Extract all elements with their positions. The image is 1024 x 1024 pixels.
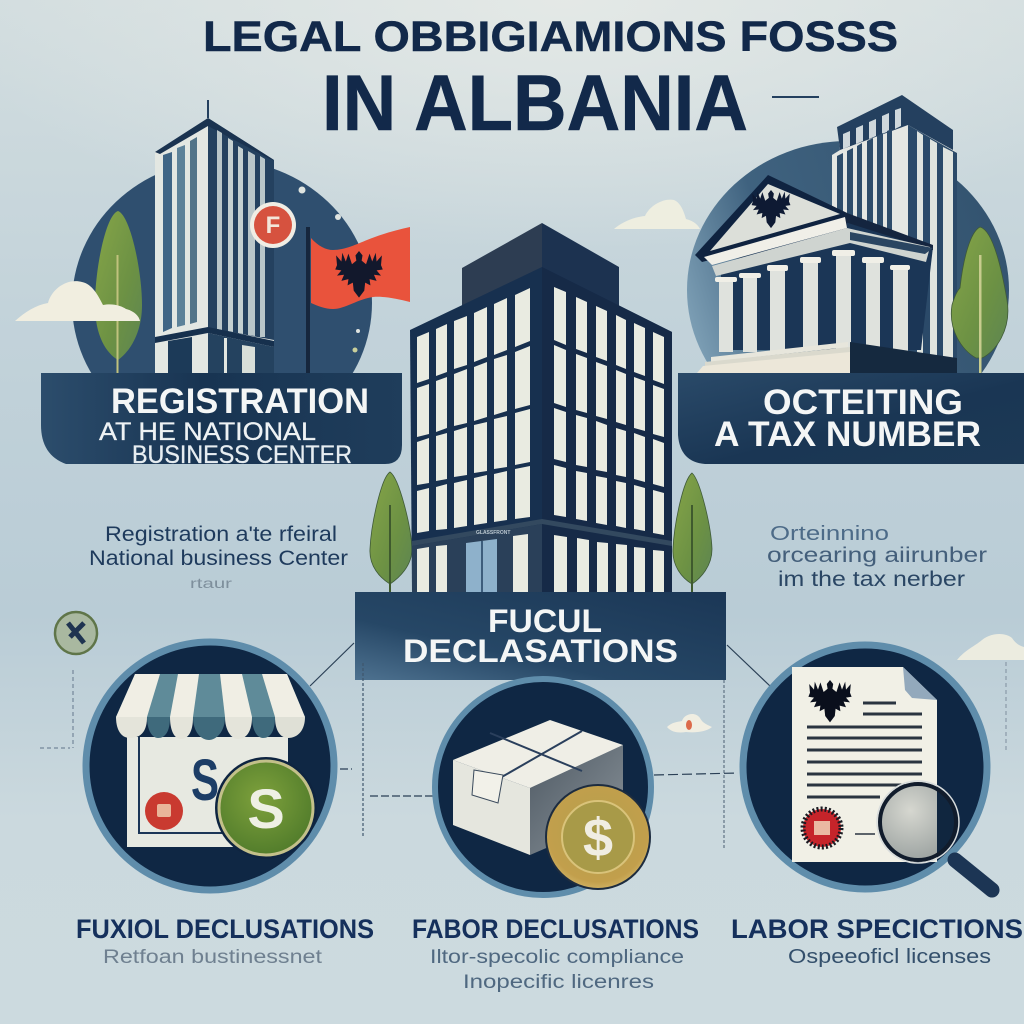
icon: lower right cloud bbox=[957, 634, 1024, 660]
text block: tax number description bbox=[767, 523, 987, 591]
title: IN ALBANIA bbox=[322, 58, 748, 147]
subheading: tax number: A TAX NUMBER bbox=[714, 415, 981, 454]
circle bbox=[435, 679, 651, 895]
panel: tax number banner bbox=[678, 373, 1024, 464]
icon: left tree bbox=[95, 211, 142, 373]
text block: registration description bbox=[89, 523, 348, 591]
icon: right tree bbox=[951, 227, 1008, 373]
circle bbox=[743, 645, 987, 889]
green coin bbox=[215, 757, 317, 859]
parcel box bbox=[453, 720, 623, 855]
ground floor bbox=[412, 519, 672, 592]
text block: registration description: National business Center bbox=[89, 547, 348, 570]
text block: parcel label: Iltor-specolic compliance bbox=[430, 947, 684, 968]
document bbox=[792, 667, 937, 862]
panel: registration illustration bbox=[15, 100, 410, 446]
icon: albanian flag bbox=[306, 227, 410, 373]
windows right face bbox=[554, 287, 664, 535]
text block: fiscal label: Retfoan bustinessnet bbox=[103, 947, 323, 968]
icon: small tool badge bbox=[55, 612, 97, 654]
text block: parcel label bbox=[412, 914, 699, 993]
heading: obtaining: OCTEITING bbox=[763, 383, 963, 422]
decorative stars bbox=[298, 186, 360, 352]
panel: tax number illustration bbox=[687, 95, 1009, 439]
heading: registration: REGISTRATION bbox=[111, 382, 369, 421]
subheading: declasations: DECLASATIONS bbox=[403, 633, 678, 669]
ground floor: GLASSFRONT bbox=[476, 530, 510, 536]
building roof block bbox=[462, 223, 619, 310]
heading: fucul: FUCUL bbox=[488, 603, 602, 639]
panel: registration banner bbox=[41, 373, 402, 469]
title bbox=[203, 13, 898, 147]
icon: right tower bbox=[832, 95, 957, 367]
dollar letter: S bbox=[191, 748, 219, 813]
gold coin: $ bbox=[583, 808, 613, 868]
subheading: business center: BUSINESS CENTER bbox=[132, 441, 352, 469]
icon: left tower bbox=[155, 100, 274, 373]
subheading: national: AT HE NATIONAL bbox=[99, 418, 316, 446]
text block: tax number description: orcearing aiirunber bbox=[767, 544, 987, 567]
text block: fiscal label: FUXIOL DECLUSATIONS bbox=[76, 914, 374, 944]
icon: right small tree bbox=[673, 473, 712, 592]
text block: fiscal label bbox=[76, 914, 374, 968]
panel: central building bbox=[370, 223, 712, 592]
text block: tax number description: im the tax nerber bbox=[778, 568, 965, 591]
red seal bbox=[145, 792, 183, 830]
text block: registration description: rtaur bbox=[190, 575, 232, 591]
icon: left cloud bbox=[15, 281, 140, 321]
decorative line near title bbox=[772, 96, 819, 98]
text block: parcel label: Inopecific licenres bbox=[463, 972, 654, 993]
text block: labor label: LABOR SPECICTIONS bbox=[731, 914, 1023, 944]
text block: registration description: Registration a'te rfeiral bbox=[105, 523, 337, 546]
gold coin bbox=[546, 785, 650, 889]
circle bbox=[86, 642, 334, 890]
icon: small cloud with red dot bbox=[667, 714, 712, 732]
awning bbox=[116, 674, 305, 740]
text block: labor label: Ospeeoficl licenses bbox=[788, 946, 991, 968]
panel: shop icon bbox=[86, 642, 334, 890]
icon: red badge: F bbox=[266, 212, 280, 239]
windows left face bbox=[417, 288, 530, 533]
icon: left small tree bbox=[370, 472, 412, 592]
green coin: S bbox=[247, 777, 285, 840]
text block: tax number description: Orteinnino bbox=[770, 523, 889, 545]
icon: government temple bbox=[695, 175, 957, 373]
building body bbox=[410, 267, 672, 592]
panel: box icon bbox=[435, 679, 651, 895]
backdrop circle left bbox=[72, 160, 372, 446]
connectors bbox=[40, 643, 1006, 848]
icon: top cloud bbox=[614, 200, 700, 229]
panel: licence document icon bbox=[743, 645, 992, 890]
title: LEGAL OBBIGIAMIONS FOSSS bbox=[203, 13, 898, 61]
text block: labor label bbox=[731, 914, 1023, 968]
icon: red badge bbox=[250, 202, 296, 248]
panel: fiscal declarations banner bbox=[355, 592, 726, 680]
magnifying glass bbox=[877, 781, 992, 890]
backdrop circle right bbox=[687, 141, 1009, 439]
text block: parcel label: FABOR DECLUSATIONS bbox=[412, 914, 699, 944]
store body bbox=[127, 737, 288, 847]
